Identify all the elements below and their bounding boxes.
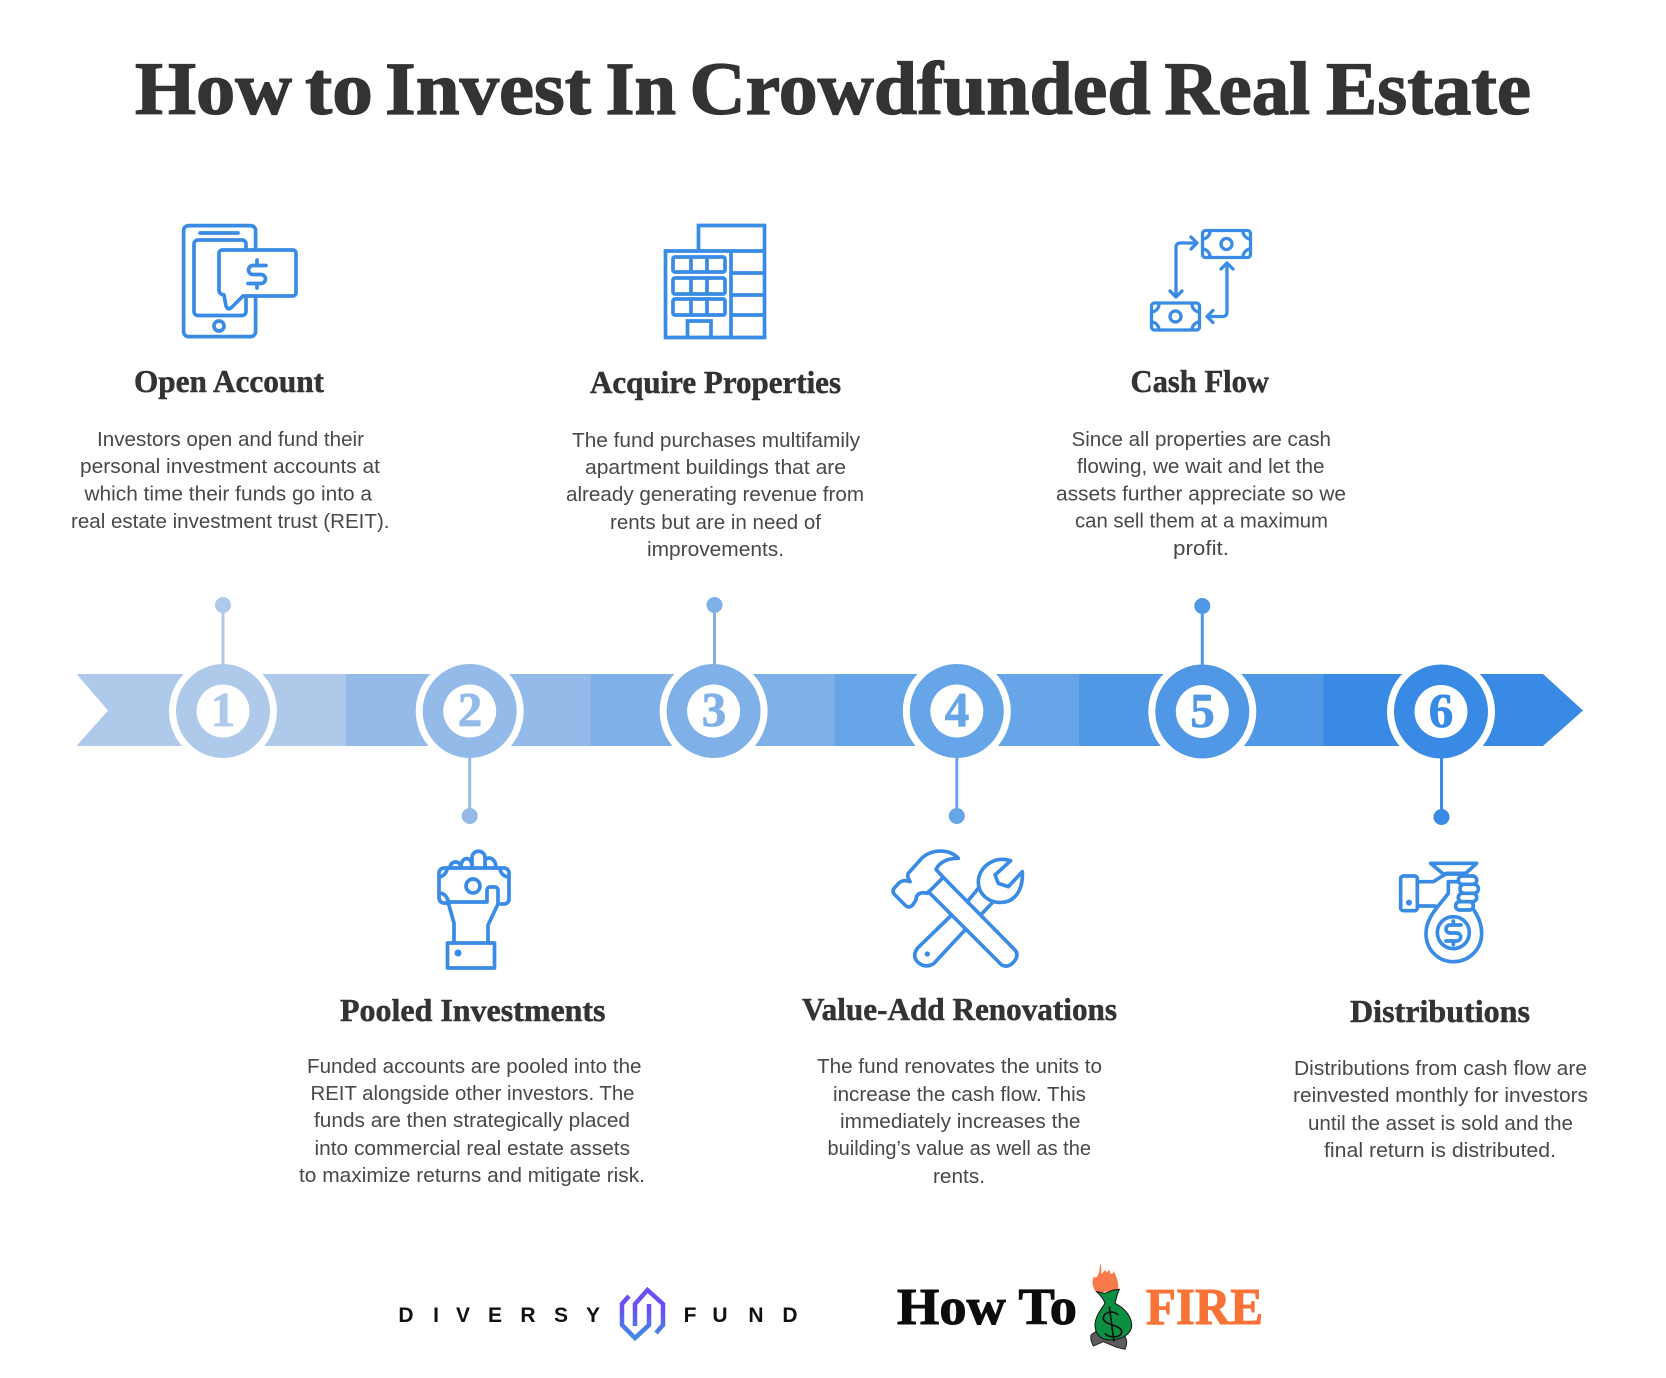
timeline arrow band bbox=[76, 674, 1583, 746]
body text: increase the cash flow. This bbox=[833, 1084, 1086, 1106]
body text: real estate investment trust (REIT). bbox=[71, 511, 389, 533]
body text: The fund purchases multifamily bbox=[572, 430, 860, 452]
step 5 marker: 5 bbox=[1190, 683, 1215, 738]
heading: Open Account bbox=[134, 363, 324, 399]
body text bbox=[817, 1056, 1102, 1188]
title: Crowdfunded bbox=[690, 48, 1150, 131]
icon: burning money bag bbox=[1091, 1263, 1132, 1349]
body text bbox=[1056, 429, 1346, 560]
step 1 marker: 1 bbox=[211, 682, 235, 737]
body text: flowing, we wait and let the bbox=[1077, 456, 1324, 478]
title bbox=[135, 48, 1531, 131]
step 2 marker bbox=[416, 657, 524, 824]
body text: which time their funds go into a bbox=[83, 484, 373, 506]
body text bbox=[566, 430, 864, 561]
heading: Pooled Investments bbox=[340, 992, 606, 1028]
body text: apartment buildings that are bbox=[585, 457, 846, 479]
step 4 marker bbox=[903, 657, 1011, 824]
body text: Funded accounts are pooled into the bbox=[307, 1056, 642, 1078]
body text: improvements. bbox=[647, 539, 784, 561]
step 3 marker: 3 bbox=[702, 682, 726, 737]
body text: funds are then strategically placed bbox=[314, 1110, 630, 1132]
body text: immediately increases the bbox=[840, 1111, 1080, 1133]
body text bbox=[299, 1056, 645, 1187]
body text: profit. bbox=[1173, 538, 1229, 560]
step 2 marker: 2 bbox=[458, 682, 482, 737]
step 1 marker bbox=[169, 597, 277, 765]
logo: How To FIRE: How To bbox=[897, 1279, 1077, 1336]
body text: reinvested monthly for investors bbox=[1293, 1085, 1588, 1107]
icon: hand holding money bag bbox=[1401, 863, 1482, 962]
panel: value-add renovations bbox=[802, 851, 1117, 1188]
body text: The fund renovates the units to bbox=[817, 1056, 1102, 1078]
panel: distributions bbox=[1293, 863, 1588, 1162]
body text: rents but are in need of bbox=[610, 512, 821, 534]
body text bbox=[1293, 1058, 1588, 1162]
logo: Diversy Fund: FUND bbox=[684, 1304, 798, 1327]
panel: open account bbox=[71, 226, 389, 533]
title: Real bbox=[1164, 48, 1310, 131]
title: In bbox=[606, 48, 676, 131]
body text bbox=[71, 429, 389, 533]
step 4 marker: 4 bbox=[945, 682, 969, 737]
heading: Value-Add Renovations bbox=[802, 991, 1117, 1027]
step 5 marker bbox=[1148, 598, 1256, 766]
body text: already generating revenue from bbox=[566, 484, 864, 506]
body text: into commercial real estate assets bbox=[314, 1138, 630, 1160]
body text: rents. bbox=[933, 1166, 985, 1188]
icon: money exchange arrows bbox=[1152, 230, 1250, 330]
panel: cash flow bbox=[1056, 230, 1346, 560]
body text: personal investment accounts at bbox=[80, 456, 380, 478]
body text: assets further appreciate so we bbox=[1056, 484, 1346, 506]
step 3 marker bbox=[660, 597, 768, 765]
logo: Diversy Fund: DIVERSY bbox=[398, 1304, 600, 1327]
logo: Diversy Fund bbox=[398, 1290, 798, 1338]
body text: REIT alongside other investors. The bbox=[310, 1083, 634, 1105]
heading: Distributions bbox=[1350, 993, 1530, 1029]
body text: Investors open and fund their bbox=[97, 429, 364, 451]
body text: can sell them at a maximum bbox=[1075, 510, 1328, 532]
body text: final return is distributed. bbox=[1324, 1140, 1556, 1162]
logo: How To FIRE: FIRE bbox=[1146, 1279, 1263, 1336]
icon: hammer and wrench bbox=[893, 851, 1022, 966]
body text: until the asset is sold and the bbox=[1308, 1113, 1573, 1135]
heading: Acquire Properties bbox=[590, 364, 841, 400]
title: How bbox=[135, 48, 292, 131]
panel: acquire properties bbox=[566, 226, 864, 561]
step 6 marker: 6 bbox=[1429, 683, 1453, 738]
body text: to maximize returns and mitigate risk. bbox=[299, 1165, 645, 1187]
icon: phone with dollar message bbox=[184, 226, 296, 337]
icon: apartment building bbox=[666, 226, 764, 338]
title: to bbox=[305, 48, 373, 131]
body text: Since all properties are cash bbox=[1072, 429, 1331, 451]
panel: pooled investments bbox=[299, 851, 645, 1187]
heading: Cash Flow bbox=[1130, 363, 1269, 399]
icon: Diversy Fund mark bbox=[622, 1290, 663, 1338]
title: Estate bbox=[1326, 48, 1531, 131]
icon: hand holding cash bbox=[439, 851, 509, 968]
body text: Distributions from cash flow are bbox=[1294, 1058, 1587, 1080]
logo: How To FIRE bbox=[897, 1263, 1263, 1349]
title: Invest bbox=[385, 48, 591, 131]
step 6 marker bbox=[1387, 658, 1495, 825]
body text: building’s value as well as the bbox=[828, 1138, 1091, 1160]
